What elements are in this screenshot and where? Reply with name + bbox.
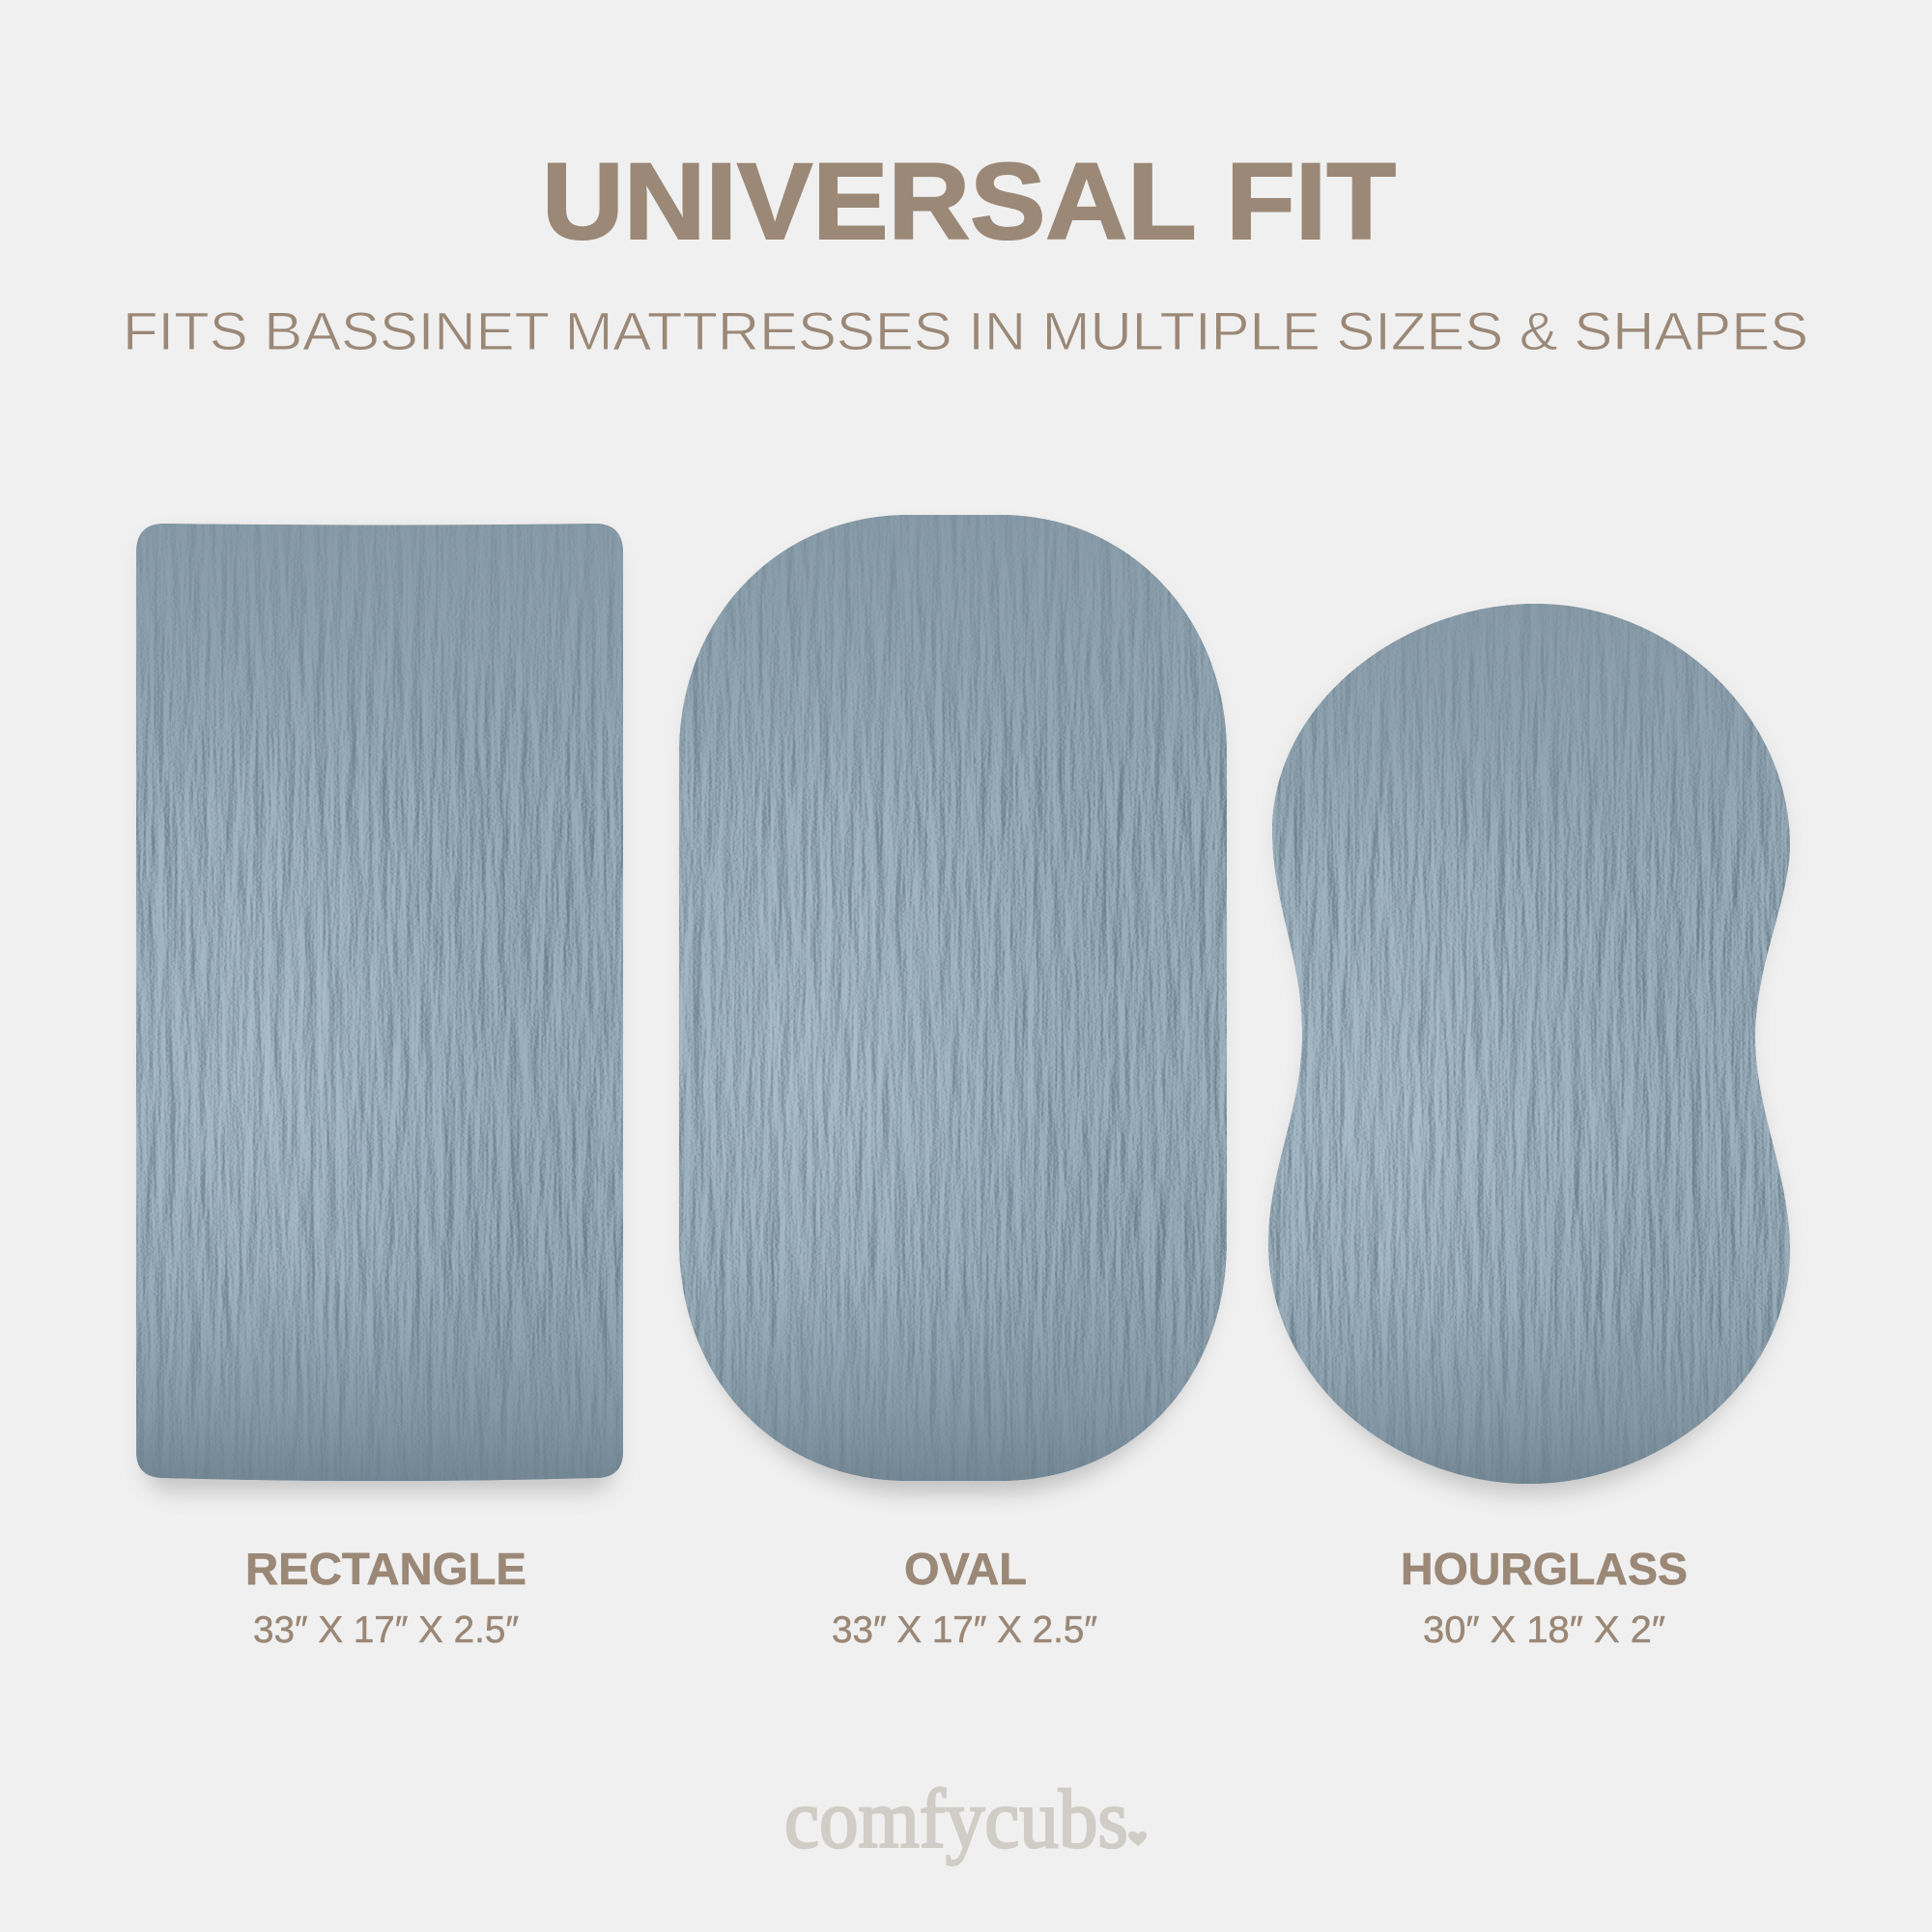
hourglass fitted sheet <box>1268 604 1790 1484</box>
oval edge shading <box>679 515 1227 1481</box>
label: rectangle: RECTANGLE <box>245 1544 526 1594</box>
dimensions: oval: 33″ X 17″ X 2.5″ <box>832 1609 1097 1651</box>
panel: rectangle mattress <box>136 524 623 1492</box>
rectangle shadow <box>145 536 614 1492</box>
logo: comfycubs <box>784 1772 1147 1865</box>
dimensions: hourglass: 30″ X 18″ X 2″ <box>1423 1609 1665 1651</box>
panel: oval mattress <box>679 515 1227 1493</box>
label: oval: OVAL <box>904 1544 1027 1594</box>
dimensions: rectangle: 33″ X 17″ X 2.5″ <box>253 1609 519 1651</box>
icon: heart <box>1128 1832 1147 1846</box>
title: UNIVERSAL FIT <box>542 141 1396 262</box>
oval fitted sheet <box>679 515 1227 1481</box>
rectangle fitted sheet <box>136 524 623 1481</box>
label: hourglass: HOURGLASS <box>1401 1544 1688 1594</box>
panel: hourglass mattress <box>1268 604 1790 1495</box>
hourglass shadow <box>1276 618 1782 1495</box>
oval shadow <box>689 531 1217 1493</box>
logo wordmark: comfycubs <box>784 1772 1128 1865</box>
hourglass edge shading <box>1268 604 1790 1484</box>
rectangle edge shading <box>136 524 623 1481</box>
subtitle: FITS BASSINET MATTRESSES IN MULTIPLE SIZES & SHAPES <box>123 300 1808 361</box>
